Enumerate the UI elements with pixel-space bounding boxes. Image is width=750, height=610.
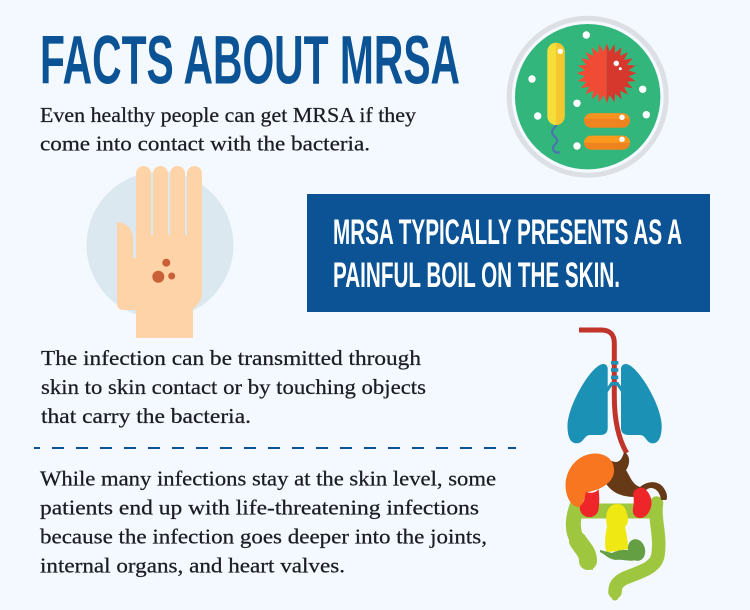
yellow bacillus (547, 43, 565, 153)
hand (117, 166, 202, 338)
pancreas (605, 504, 628, 552)
intestines (573, 503, 659, 597)
white dots (528, 31, 650, 150)
icon: petri dish with bacteria (509, 18, 666, 175)
red spiky bacterium (577, 43, 637, 103)
spleen (600, 537, 648, 563)
transmission text: skin to skin contact or by touching objects (41, 375, 426, 399)
kidneys (580, 488, 652, 518)
transmission text: that carry the bacteria. (41, 404, 251, 428)
intro text: come into contact with the bacteria. (40, 132, 370, 156)
lungs (568, 364, 662, 443)
liver (566, 454, 614, 507)
icon: hand with skin boils (86, 166, 234, 338)
boils (152, 259, 175, 283)
transmission text (41, 346, 426, 428)
icon: internal organs (566, 330, 667, 597)
complications text: because the infection goes deeper into the joints, (40, 524, 487, 548)
complications text (40, 466, 496, 578)
intro text: Even healthy people can get MRSA if they (40, 103, 417, 127)
complications text: While many infections stay at the skin level, some (40, 466, 496, 490)
banner text (333, 213, 682, 295)
complications text: internal organs, and heart valves. (40, 554, 345, 578)
complications text: patients end up with life-threatening infections (40, 496, 479, 520)
title: FACTS ABOUT MRSA (40, 22, 460, 98)
intro text (40, 103, 417, 156)
callout banner (307, 194, 710, 312)
transmission text: The infection can be transmitted through (41, 346, 422, 370)
orange capsules (584, 113, 630, 150)
stomach (600, 452, 667, 500)
trachea (579, 330, 627, 453)
bronchi bands (611, 361, 618, 386)
